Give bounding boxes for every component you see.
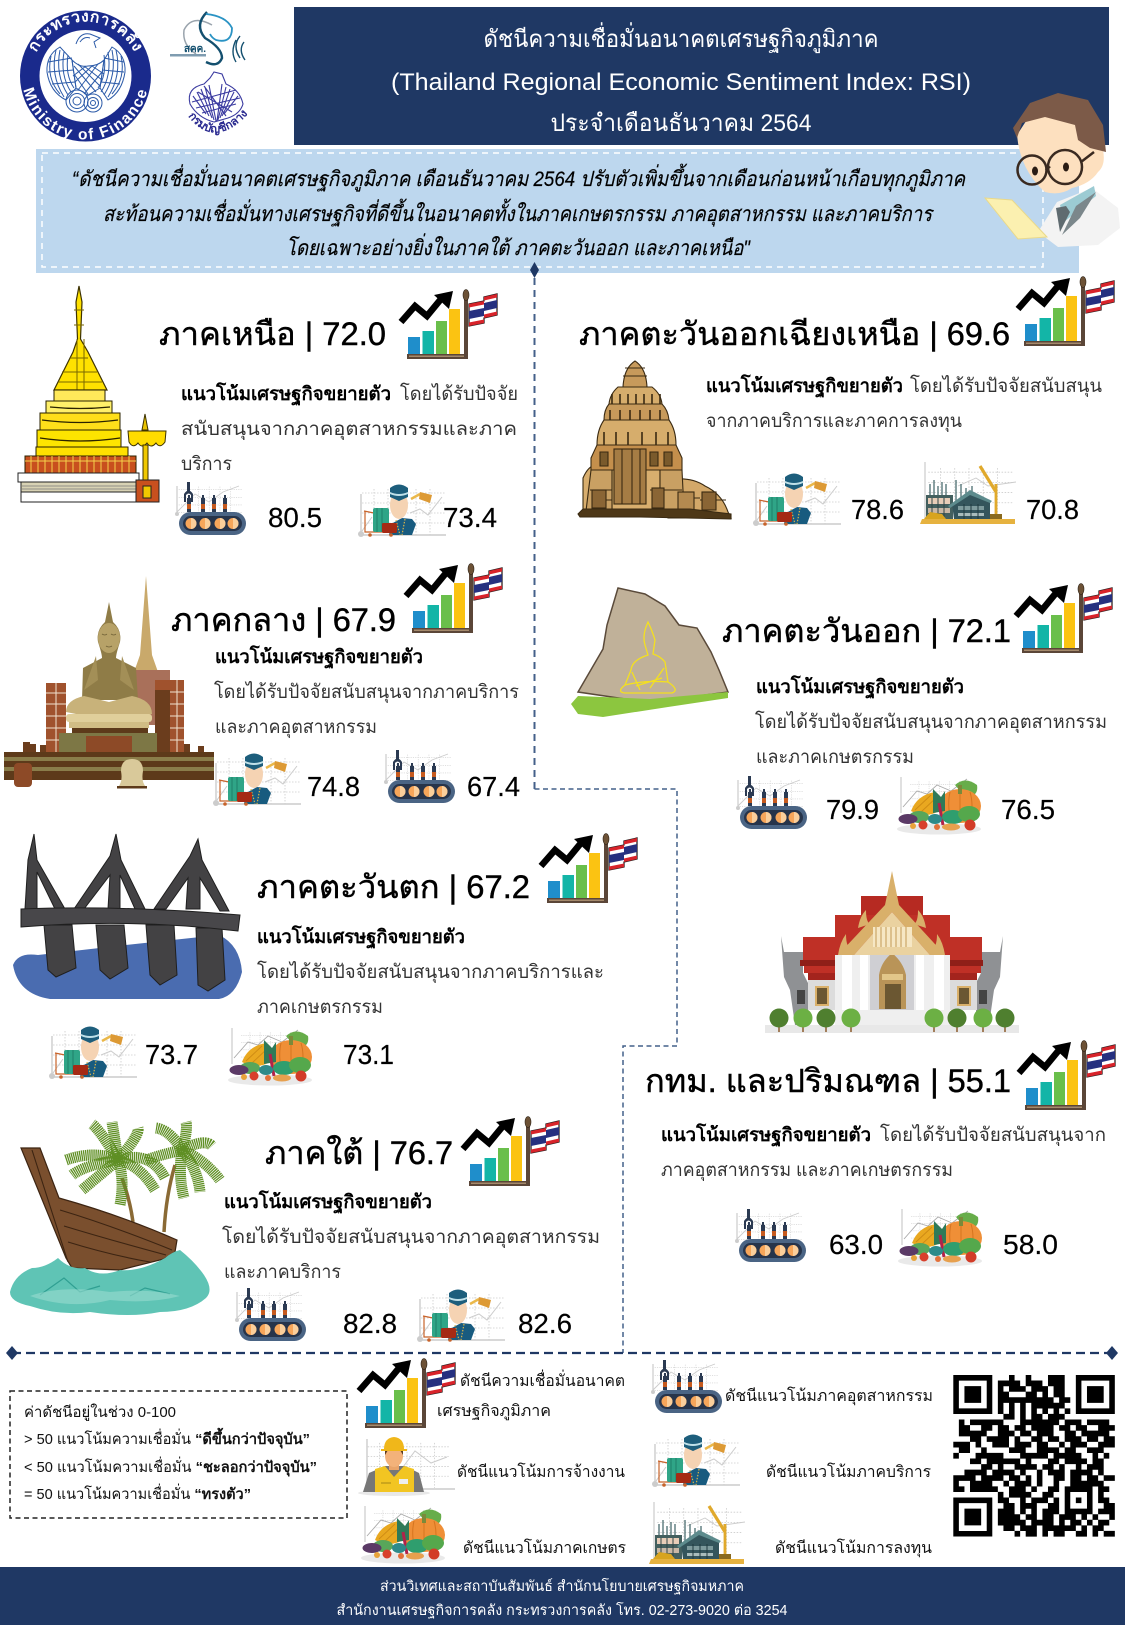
quote panel: “ดัชนีความเชื่อมั่นอนาคตเศรษฐกิจภูมิภาค เดือนธันวาคม 2564 ปรับตัวเพิ่มขึ้นจากเดือนก่อนหน้าเกือบทุกภูมิภาค — [72, 163, 966, 192]
legend item: industry index — [651, 1360, 933, 1413]
description — [706, 374, 1102, 433]
icon: agriculture index — [898, 1209, 982, 1266]
heading: ภาคตะวันตก | 67.2 — [257, 869, 530, 905]
logo: Comptroller General garuda: กรมบัญชีกลาง — [188, 110, 248, 136]
icon: sentiment chart — [541, 834, 637, 903]
description — [222, 1190, 600, 1283]
description: แนวโน้มเศรษฐกิจขยายตัว — [224, 1190, 432, 1215]
icon: industry index — [384, 750, 455, 803]
icon: agriculture index — [228, 1028, 312, 1086]
description — [755, 675, 1107, 768]
description: สนับสนุนจากภาคอุตสาหกรรมและภาค — [181, 419, 517, 441]
icon: sentiment chart — [401, 290, 497, 359]
title banner: (Thailand Regional Economic Sentiment Index: RSI) — [391, 69, 971, 96]
panel: West region — [13, 834, 637, 1086]
icon: investment index — [920, 462, 1016, 524]
value: industry: 79.9 — [826, 794, 879, 825]
panel: Northeast region — [578, 276, 1114, 526]
icon: industry index — [175, 482, 246, 535]
legend item: industry index: ดัชนีแนวโน้มภาคอุตสาหกรรม — [725, 1386, 933, 1406]
heading: กทม. และปริมณฑล | 55.1 — [645, 1063, 1011, 1099]
description: แนวโน้มเศรษฐกิจขยายตัว — [756, 675, 964, 700]
description: และภาคบริการ — [224, 1262, 341, 1283]
value: industry: 63.0 — [829, 1229, 883, 1260]
value: service: 82.6 — [518, 1308, 572, 1339]
legend item: employment index — [358, 1437, 625, 1496]
value: agriculture: 58.0 — [1003, 1229, 1058, 1260]
value: service: 74.8 — [307, 771, 360, 802]
description: แนวโน้มเศรษฐกิจขยายตัว — [181, 382, 391, 407]
title banner — [294, 7, 1109, 145]
panel: East region — [571, 584, 1112, 834]
icon: sentiment chart — [406, 564, 502, 633]
value: industry: 67.4 — [467, 771, 520, 802]
description — [257, 925, 604, 1018]
illustration: long-tail boat and palms — [10, 1122, 220, 1315]
heading: ภาคตะวันออกเฉียงเหนือ | 69.6 — [579, 316, 1010, 352]
icon: industry index — [235, 1288, 306, 1341]
description: แนวโน้มเศรษฐกิจขยายตัว — [257, 925, 465, 950]
description: แนวโน้มเศรษฐกิขยายตัว — [706, 374, 903, 399]
description — [214, 645, 519, 739]
icon: sentiment chart — [1016, 584, 1112, 653]
logo: swirl agency mark: สคค. — [184, 44, 206, 55]
value: service: 73.4 — [443, 502, 497, 533]
callout: index range explanation — [10, 1391, 347, 1518]
icon: service index — [417, 1290, 505, 1342]
quote panel — [36, 149, 1079, 273]
illustration: Marble Temple — [765, 871, 1019, 1033]
description — [661, 1123, 1106, 1182]
panel: North region — [18, 286, 518, 537]
legend item: service index: ดัชนีแนวโน้มภาคบริการ — [766, 1462, 931, 1481]
icon: sentiment chart — [1018, 276, 1114, 346]
QR code — [953, 1375, 1115, 1537]
value: service: 78.6 — [851, 494, 904, 525]
logo: Ministry of Finance: Ministry of Finance — [24, 87, 146, 140]
legend item: service index — [652, 1434, 931, 1487]
footer band: สำนักงานเศรษฐกิจการคลัง กระทรวงการคลัง โทร. 02-273-9020 ต่อ 3254 — [336, 1601, 788, 1619]
value: investment: 70.8 — [1026, 494, 1079, 525]
description: บริการ — [181, 454, 232, 475]
legend item: agriculture index: ดัชนีแนวโน้มภาคเกษตร — [463, 1538, 626, 1557]
panel: South region — [10, 1116, 600, 1342]
logo: swirl agency mark — [170, 12, 245, 64]
description: แนวโน้มเศรษฐกิจขยายตัว — [215, 645, 423, 670]
description: ภาคอุตสาหกรรม และภาคเกษตรกรรม — [661, 1160, 953, 1182]
footer band — [0, 1567, 1125, 1625]
icon: service index — [49, 1026, 137, 1079]
icon: sentiment chart — [1019, 1040, 1115, 1110]
description: และภาคเกษตรกรรม — [756, 747, 914, 768]
title banner: ประจำเดือนธันวาคม 2564 — [550, 110, 812, 137]
icon: sentiment chart — [463, 1116, 559, 1186]
legend item: investment index — [649, 1502, 932, 1564]
footer band: ส่วนวิเทศและสถาบันสัมพันธ์ สำนักนโยบายเศรษฐกิจมหภาค — [380, 1577, 744, 1595]
description: โดยได้รับปัจจัยสนับสนุนจากภาคอุตสาหกรรม — [755, 710, 1107, 734]
icon: agriculture index — [897, 777, 981, 834]
heading: ภาคใต้ | 76.7 — [265, 1135, 453, 1171]
description: จากภาคบริการและภาคการลงทุน — [706, 411, 962, 433]
icon: industry index — [735, 1209, 806, 1262]
description — [181, 382, 518, 475]
icon: service index — [213, 754, 301, 806]
quote panel: โดยเฉพาะอย่างยิ่งในภาคใต้ ภาคตะวันออก และภาคเหนือ" — [286, 233, 751, 260]
legend item: employment index: ดัชนีแนวโน้มการจ้างงาน — [457, 1462, 625, 1481]
value: service: 73.7 — [145, 1039, 198, 1070]
title banner: ดัชนีความเชื่อมั่นอนาคตเศรษฐกิจภูมิภาค — [484, 22, 878, 54]
value: industry: 80.5 — [268, 502, 322, 533]
heading: ภาคเหนือ | 72.0 — [159, 316, 386, 352]
callout: index range explanation: < 50 แนวโน้มความเชื่อมั่น “ชะลอกว่าปัจจุบัน” — [24, 1456, 317, 1477]
panel: Central region — [4, 564, 520, 806]
illustration: Phimai prang monument — [578, 361, 731, 519]
icon: industry index — [736, 776, 807, 829]
description: และภาคอุตสาหกรรม — [215, 717, 377, 739]
value: industry: 82.8 — [343, 1308, 397, 1339]
description: โดยได้รับปัจจัยสนับสนุนจากภาคบริการ — [214, 680, 519, 704]
description: โดยได้รับปัจจัยสนับสนุนจากภาคบริการและ — [257, 960, 604, 984]
legend: index icons — [358, 1358, 933, 1564]
description: โดยได้รับปัจจัยสนับสนุนจาก — [880, 1123, 1106, 1147]
description: แนวโน้มเศรษฐกิจขยายตัว — [661, 1123, 871, 1148]
logo: Ministry of Finance — [20, 10, 151, 142]
quote panel: สะท้อนความเชื่อมั่นทางเศรษฐกิจที่ดีขึ้นในอนาคตทั้งในภาคเกษตรกรรม ภาคอุตสาหกรรม และภาคบริการ — [103, 198, 934, 227]
illustration: golden chedi — [18, 286, 166, 502]
logo: Ministry of Finance: กระทรวงการคลัง — [30, 12, 142, 52]
illustration: doctor with tablet — [985, 93, 1125, 260]
description: ภาคเกษตรกรรม — [257, 997, 383, 1018]
legend item: sentiment index — [359, 1358, 625, 1428]
legend item: sentiment index: ดัชนีความเชื่อมั่นอนาคต — [460, 1369, 625, 1390]
legend item: investment index: ดัชนีแนวโน้มการลงทุน — [775, 1538, 932, 1558]
description: โดยได้รับปัจจัยสนับสนุนจากภาคอุตสาหกรรม — [222, 1225, 600, 1249]
callout: index range explanation: = 50 แนวโน้มความเชื่อมั่น “ทรงตัว” — [24, 1483, 251, 1503]
icon: service index — [753, 474, 841, 526]
value: agriculture: 73.1 — [343, 1039, 394, 1070]
heading: ภาคตะวันออก | 72.1 — [722, 613, 1011, 649]
callout: index range explanation: ค่าดัชนีอยู่ในช่วง 0-100 — [24, 1403, 176, 1421]
description: โดยได้รับปัจจัยสนับสนุน — [910, 374, 1102, 398]
illustration: carved Buddha rock — [571, 588, 728, 717]
description: โดยได้รับปัจจัย — [400, 382, 518, 405]
heading: ภาคกลาง | 67.9 — [171, 602, 396, 638]
value: agriculture: 76.5 — [1001, 794, 1055, 825]
icon: service index — [358, 484, 446, 537]
illustration: Sukhothai Buddha — [4, 576, 214, 788]
divider: dashed timeline connecting regions — [6, 262, 1118, 1360]
logo: Comptroller General garuda — [188, 71, 248, 136]
callout: index range explanation: > 50 แนวโน้มความเชื่อมั่น “ดีขึ้นกว่าปัจจุบัน” — [24, 1427, 310, 1449]
legend item: agriculture index — [361, 1506, 626, 1564]
panel: Bangkok and vicinity — [645, 871, 1115, 1266]
legend item: sentiment index: เศรษฐกิจภูมิภาค — [437, 1403, 551, 1421]
illustration: Rama bridge — [13, 834, 242, 999]
